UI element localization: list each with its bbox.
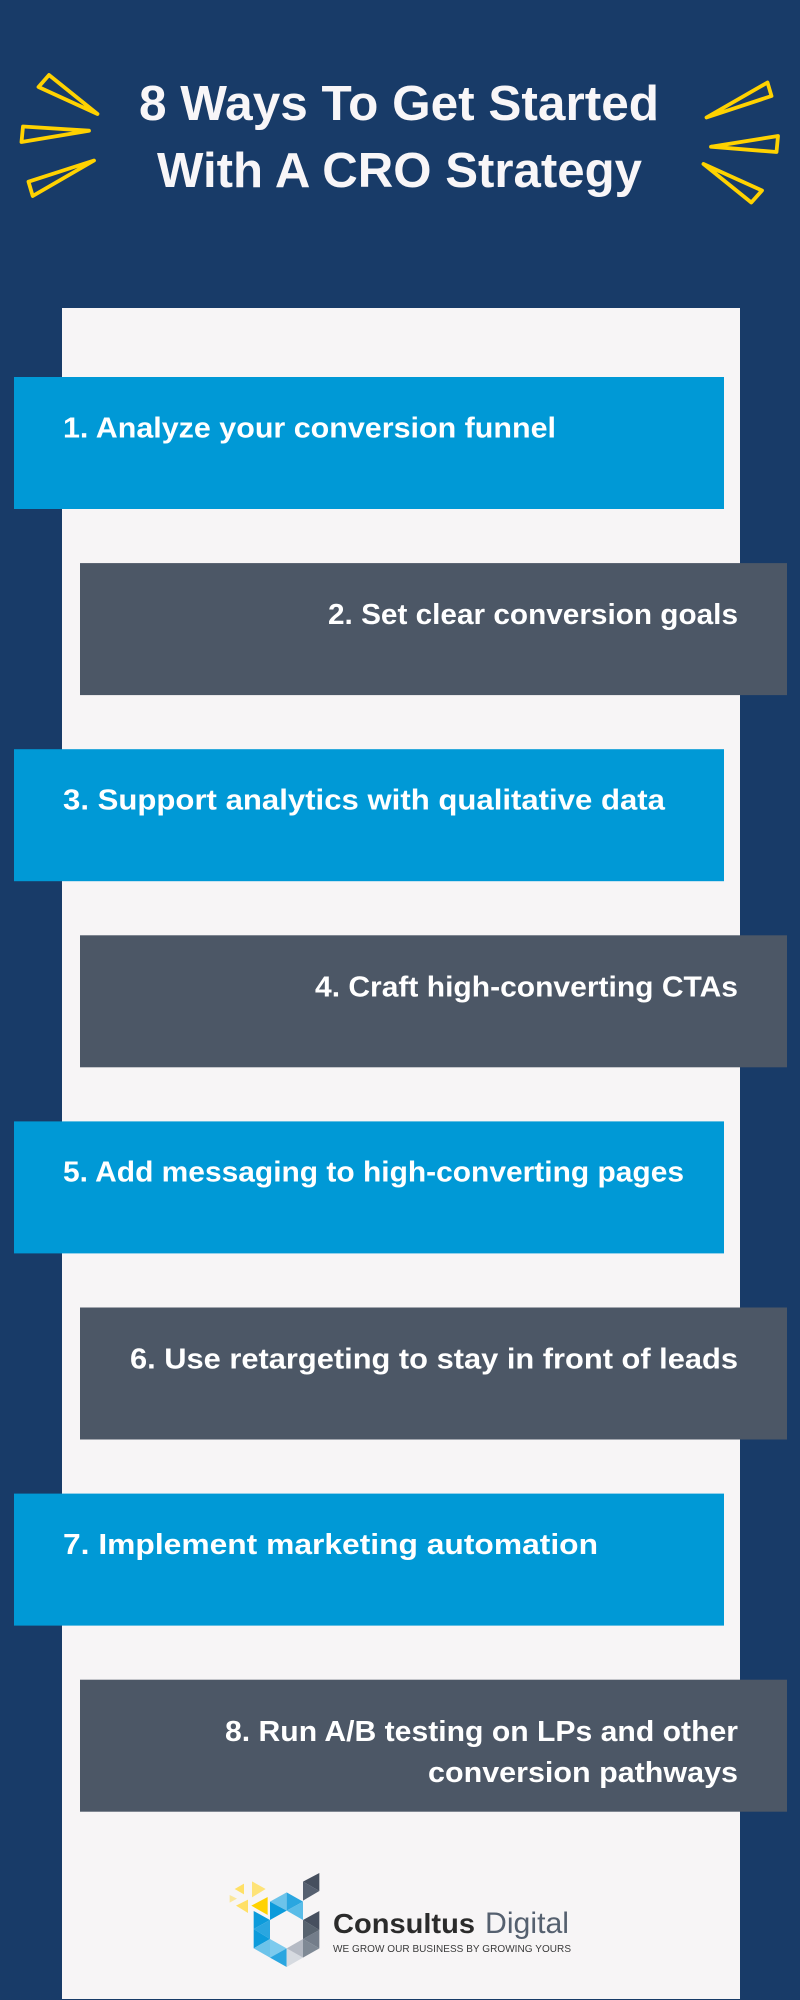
- logo tagline: WE GROW OUR BUSINESS BY GROWING YOURS: [333, 1944, 571, 1955]
- step 8: [80, 1680, 787, 1812]
- title: 8 Ways To Get Started: [139, 77, 659, 131]
- logo: Consultus Digital: [230, 1873, 571, 1967]
- logo wordmark: [333, 1907, 569, 1940]
- step 3: [14, 749, 724, 881]
- step 6: [80, 1308, 787, 1440]
- step 3: 3. Support analytics with qualitative data: [63, 785, 666, 817]
- logo wordmark: Consultus: [333, 1908, 475, 1939]
- step 7: 7. Implement marketing automation: [63, 1529, 598, 1561]
- step 6: 6. Use retargeting to stay in front of leads: [130, 1344, 738, 1376]
- step 7: [14, 1494, 724, 1626]
- step 1: [14, 377, 724, 509]
- step 5: [14, 1121, 724, 1253]
- title: With A CRO Strategy: [157, 144, 642, 198]
- icon: logo hexagon mark: [230, 1873, 319, 1967]
- panel: light content column: [62, 308, 740, 1999]
- step 4: 4. Craft high-converting CTAs: [315, 971, 738, 1003]
- step 8: conversion pathways: [428, 1757, 738, 1789]
- step 1: 1. Analyze your conversion funnel: [63, 412, 556, 444]
- step 2: [80, 563, 787, 695]
- icon: right yellow burst: [704, 82, 778, 202]
- logo wordmark: Digital: [485, 1907, 569, 1940]
- icon: left yellow burst: [22, 75, 98, 196]
- title: [139, 77, 659, 198]
- step 2: 2. Set clear conversion goals: [328, 599, 738, 631]
- step 5: 5. Add messaging to high-converting pages: [63, 1156, 684, 1188]
- step 4: [80, 935, 787, 1067]
- step 8: 8. Run A/B testing on LPs and other: [225, 1716, 738, 1748]
